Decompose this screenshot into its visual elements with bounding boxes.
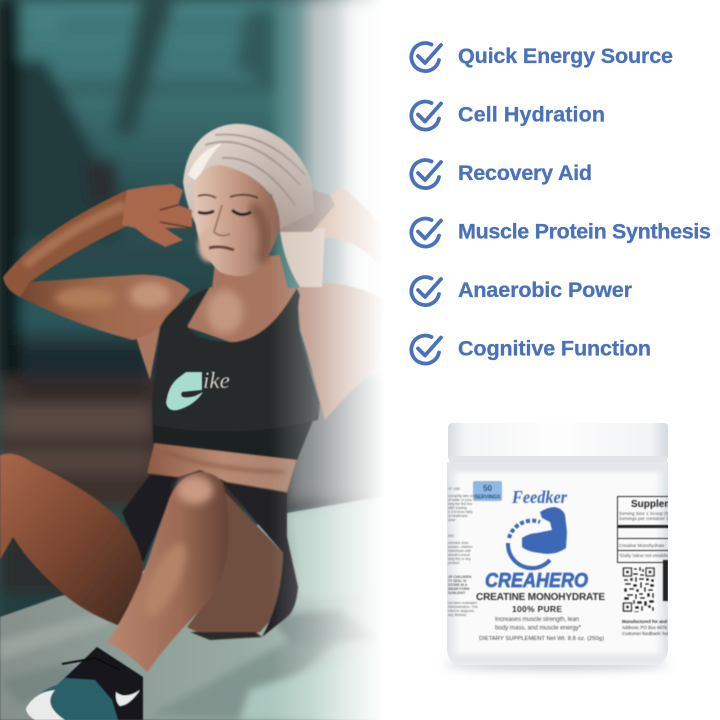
photo: woman doing sit-ups <box>0 0 407 720</box>
shoe <box>26 647 143 720</box>
side panel: directions text <box>448 487 478 617</box>
manufacturer text: Manufactured for and distributed <box>622 619 691 624</box>
photo background: gym wall and floor <box>0 0 407 720</box>
side panel: directions text: ST USE <box>448 487 461 491</box>
description <box>495 616 582 632</box>
side panel: directions text: any disease. <box>448 613 467 617</box>
QR code <box>623 565 655 612</box>
side panel: directions text: or healthcare <box>448 514 468 518</box>
benefit: Cell Hydration <box>411 102 605 130</box>
product subtitle: CREATINE MONOHYDRATE <box>476 592 605 603</box>
side panel: directions text: TY SEAL IS <box>448 579 467 583</box>
side panel: directions text: after loading <box>448 506 467 510</box>
side panel: directions text: OF CHILDREN. <box>448 575 472 579</box>
bra logo <box>166 368 230 410</box>
servings badge <box>473 481 502 501</box>
neck <box>211 254 288 289</box>
raised shin <box>107 472 229 672</box>
jar lid <box>448 423 668 462</box>
side panel: directions text: not been evaluated <box>448 601 477 605</box>
icon: check circle <box>411 336 441 364</box>
icon: check circle <box>411 102 441 130</box>
icon: check circle <box>411 277 441 305</box>
side panel: directions text: ING <box>448 534 454 538</box>
lower hair tail <box>280 228 325 287</box>
side panel: directions text: should consult <box>448 553 470 557</box>
side panel: directions text: scoop/5g take one <box>448 494 476 498</box>
right forearm and hand <box>315 190 374 258</box>
armpit and chest skin <box>133 287 297 380</box>
forearm left <box>3 190 140 297</box>
benefit: Recovery Aid <box>411 160 592 188</box>
benefit: Recovery Aid: Recovery Aid <box>458 161 592 185</box>
side panel: directions text: STORE IN A <box>448 583 468 587</box>
benefit: Quick Energy Source: Quick Energy Source <box>458 44 673 68</box>
supplement facts panel: Serving Size 1 Scoop (5g) <box>619 511 673 516</box>
side panel: directions text: WEAR FORM <box>448 587 469 591</box>
supplement facts panel: Servings per container 50 <box>619 516 672 521</box>
manufacturer text <box>622 619 694 636</box>
supplement facts panel: *Daily Value not established <box>619 553 676 558</box>
product jar <box>445 423 694 670</box>
supplement facts panel <box>616 495 668 564</box>
hand left <box>122 184 192 247</box>
supplement facts panel: Supplement <box>631 499 689 510</box>
side panel: directions text: women, children <box>448 545 473 549</box>
benefit: Cognitive Function <box>411 336 651 364</box>
benefits list <box>411 43 711 364</box>
benefit: Muscle Protein Synthesis: Muscle Protein Synthesis <box>458 220 711 244</box>
supplement facts panel: Creatine Monohydrate <box>619 543 665 548</box>
icon: flexed arm <box>508 507 567 568</box>
left thigh <box>0 454 143 627</box>
benefit: Cell Hydration: Cell Hydration <box>458 102 605 126</box>
brand: Feedker: Feedker <box>511 487 568 507</box>
icon: check circle <box>411 43 441 71</box>
hair <box>183 124 314 230</box>
side panel: directions text: sing this or any <box>448 557 471 561</box>
purity: 100% PURE <box>512 604 562 614</box>
white fade overlay <box>270 0 385 720</box>
right upper arm <box>297 284 385 420</box>
side panel: directions text: of water or juice, <box>448 498 473 502</box>
athlete figure <box>0 124 385 672</box>
benefit: Cognitive Function: Cognitive Function <box>458 336 651 360</box>
barcode edge <box>663 560 668 601</box>
manufacturer text: Address: PO Box 4679, Boulder City <box>622 625 694 630</box>
hair bun going to hand <box>279 190 335 233</box>
description: body mass, and muscle energy* <box>495 624 582 632</box>
icon: check circle <box>411 219 441 247</box>
benefit: Anaerobic Power: Anaerobic Power <box>458 278 633 302</box>
exercise mat <box>0 497 400 720</box>
manufacturer text: Customer feedback: help@feedker <box>622 631 690 636</box>
face <box>194 165 280 276</box>
side panel: directions text: king the first five <box>448 502 473 506</box>
back thigh <box>187 487 284 638</box>
brows eyes nose mouth <box>198 195 258 198</box>
dietary and net weight: DIETARY SUPPLEMENT Net Wt. 8.8 oz. (250g) <box>479 636 604 642</box>
side panel: directions text: product. <box>448 561 460 565</box>
icon: check circle <box>411 160 441 188</box>
product name: CREAHERO <box>485 570 588 592</box>
bra logo: ike <box>203 368 230 393</box>
side panel: directions text: dose <box>448 518 455 522</box>
benefit: Anaerobic Power <box>411 277 633 305</box>
shorts <box>122 475 180 563</box>
jar body <box>447 462 668 665</box>
servings badge: SERVINGS <box>475 494 501 500</box>
side panel: directions text: nded to diagnose, <box>448 609 475 613</box>
servings badge: 50 <box>483 484 492 493</box>
side panel: directions text: individuals with <box>448 549 471 553</box>
description: Increases muscle strength, lean <box>495 616 580 623</box>
jar label <box>448 481 694 642</box>
side panel: directions text: mended dose. <box>448 541 470 545</box>
stomach <box>147 440 297 492</box>
sports bra <box>152 287 320 460</box>
side panel: directions text: Administration. This <box>448 605 478 609</box>
upper arm left <box>20 275 190 340</box>
side panel: directions text: e 3-5 times daily <box>448 510 473 514</box>
side panel: directions text: SUNLIGHT. <box>448 591 466 595</box>
